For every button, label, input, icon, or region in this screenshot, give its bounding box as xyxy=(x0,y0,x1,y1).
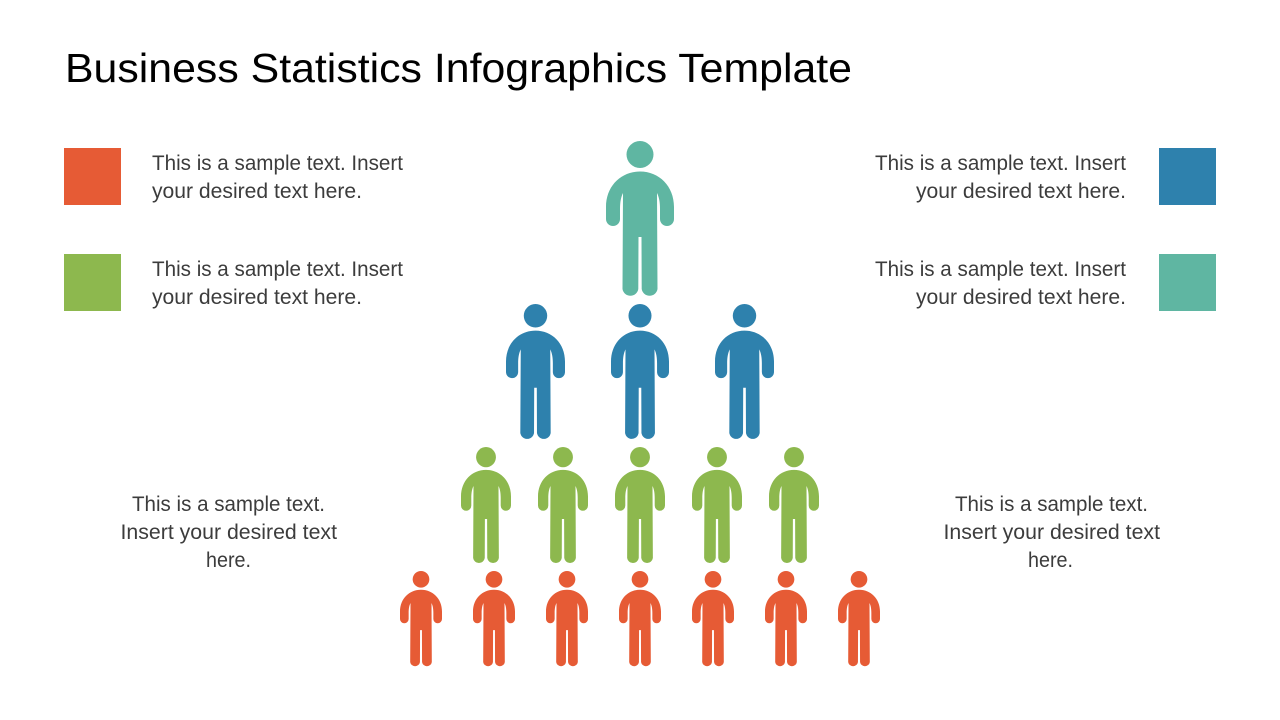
pyramid tier 1: teal person xyxy=(606,141,674,296)
pyramid tier 2: blue people xyxy=(506,304,774,439)
text block: bottom left: here. xyxy=(206,549,251,572)
text block: bottom right: This is a sample text. xyxy=(955,493,1148,516)
legend square: orange xyxy=(64,148,121,205)
legend square: teal xyxy=(1159,254,1216,311)
legend text: blue: This is a sample text. Insert xyxy=(875,152,1126,175)
legend text: teal: This is a sample text. Insert xyxy=(875,258,1126,281)
text block: bottom left: This is a sample text. xyxy=(132,493,325,516)
text block: bottom right xyxy=(944,493,1160,572)
legend text: orange: This is a sample text. Insert xyxy=(152,152,403,175)
pyramid tier 4: orange people xyxy=(400,571,880,666)
title: Business Statistics Infographics Template xyxy=(65,45,852,91)
text block: bottom left xyxy=(120,493,337,572)
text block: bottom left: Insert your desired text xyxy=(120,521,337,544)
legend square: green xyxy=(64,254,121,311)
legend text: teal: your desired text here. xyxy=(916,286,1126,309)
legend square: blue xyxy=(1159,148,1216,205)
legend text: orange xyxy=(152,152,403,203)
legend text: green: your desired text here. xyxy=(152,286,362,309)
legend text: green xyxy=(152,258,403,309)
pyramid tier 3: green people xyxy=(461,447,819,563)
text block: bottom right: Insert your desired text xyxy=(944,521,1160,544)
legend text: teal xyxy=(875,258,1126,309)
text block: bottom right: here. xyxy=(1028,549,1073,572)
legend text: blue xyxy=(875,152,1126,203)
legend text: green: This is a sample text. Insert xyxy=(152,258,403,281)
legend text: blue: your desired text here. xyxy=(916,180,1126,203)
legend text: orange: your desired text here. xyxy=(152,180,362,203)
